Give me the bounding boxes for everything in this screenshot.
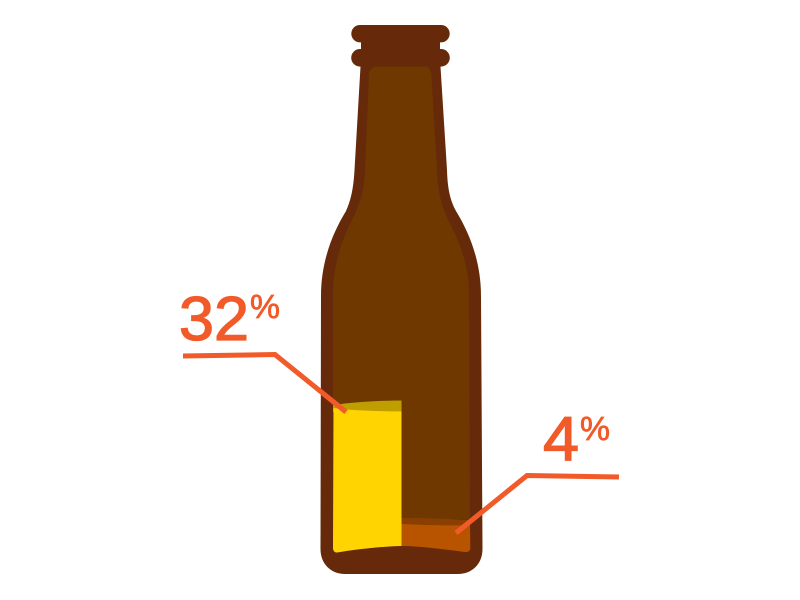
yellow sample shadow top: [333, 400, 402, 412]
4% orange sample: [402, 518, 470, 552]
callout line: 32%: [183, 354, 346, 412]
label: 32%: 32: [179, 285, 249, 354]
orange sample body: [402, 524, 470, 552]
callout line: 4%: [456, 476, 619, 533]
label: 32% percent sign: %: [250, 288, 280, 325]
bottle outer glass: [320, 25, 482, 574]
32% yellow sample: [333, 400, 402, 553]
yellow sample body: [333, 408, 402, 553]
bottle inner dark liquid: [333, 66, 470, 519]
label: 4%: 4: [543, 405, 579, 474]
label: 4% percent sign: %: [580, 410, 610, 447]
orange sample shadow top: [402, 518, 470, 527]
bottle: [320, 25, 482, 574]
